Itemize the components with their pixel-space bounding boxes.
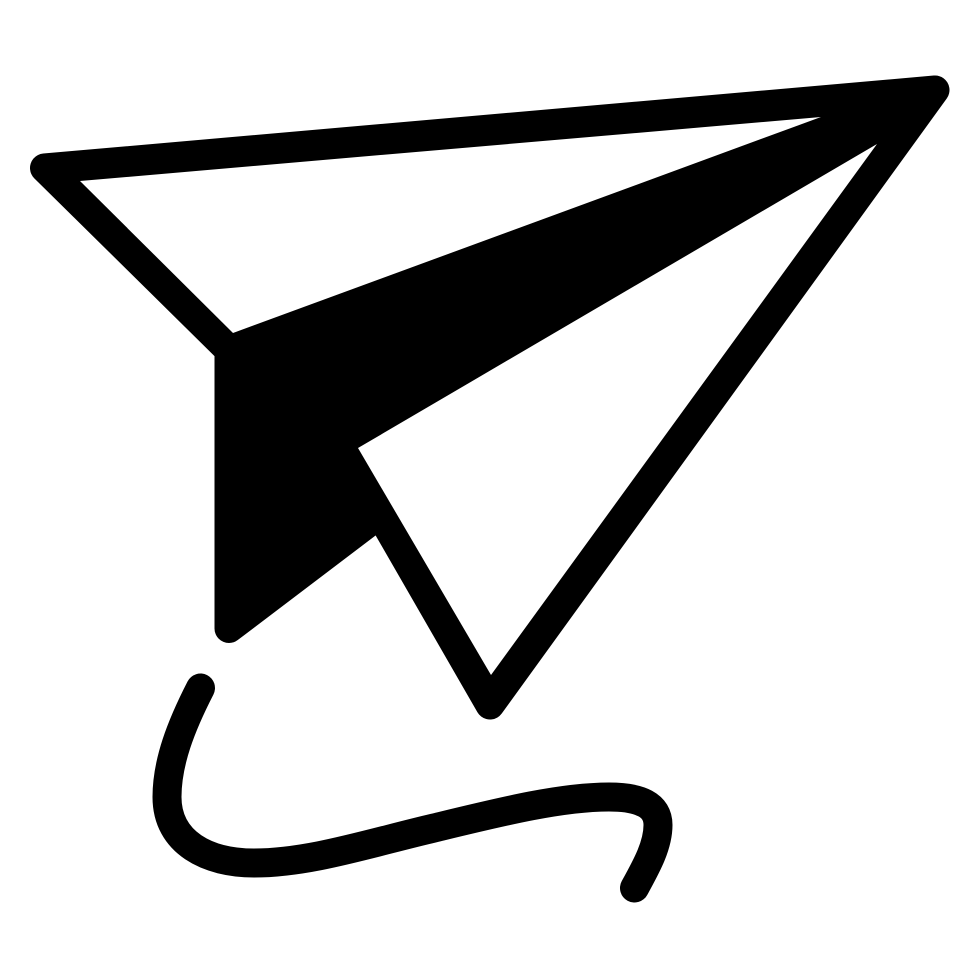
flight trail <box>167 688 658 888</box>
plane silhouette <box>44 90 935 705</box>
paper plane <box>44 90 935 705</box>
upper wing cutout <box>80 117 821 333</box>
right wing cutout <box>358 144 877 675</box>
